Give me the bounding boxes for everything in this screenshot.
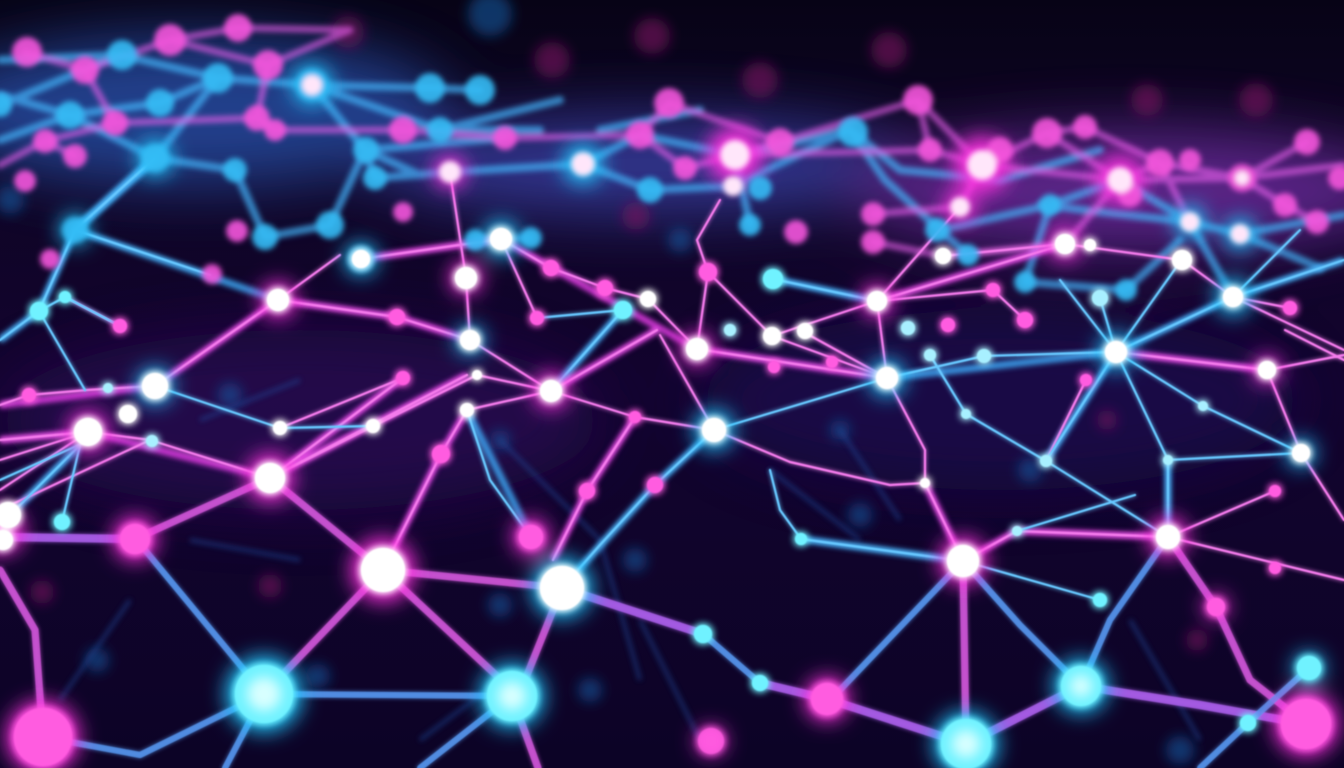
foreground thick connections: [0, 478, 1309, 768]
pink upper links: [0, 28, 1344, 256]
pink thick links: [0, 478, 1306, 768]
mid network crisp blue links: [0, 158, 1344, 600]
blurred blue nodes: [0, 40, 1137, 301]
lavender thick links: [0, 537, 1306, 744]
white node cores: [0, 228, 1310, 610]
background faint connections: [60, 380, 1200, 740]
blue upper links: [0, 55, 1344, 297]
blurred upper nodes: [0, 14, 1344, 301]
blurred pink nodes: [12, 14, 1344, 284]
blue thick links: [43, 537, 1309, 768]
background haze band: [0, 35, 1344, 510]
bright upper node highlights: [302, 75, 1250, 244]
pink large node bodies: [14, 260, 1331, 766]
mid network links glow: [0, 158, 1344, 588]
cyan large node bodies: [30, 269, 1321, 768]
small cyan junction nodes: [103, 290, 1208, 536]
upper blurred mesh: [0, 28, 1344, 297]
soft cyan centers: [247, 675, 1092, 758]
mid network crisp pink links: [0, 172, 1344, 580]
